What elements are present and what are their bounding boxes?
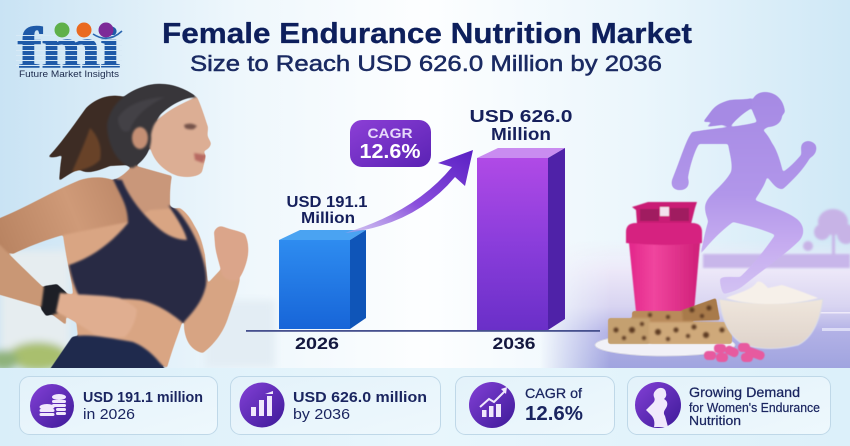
torso skin [63,208,205,368]
axis [246,330,600,332]
logo wordmark: Future Market Insights [19,69,120,79]
track and scenery, right side [540,209,850,368]
ponytail [48,96,130,181]
runner silhouette [672,92,816,294]
icon: coins [30,384,74,428]
CAGR pill: CAGR [368,126,413,141]
CAGR pill: 12.6% [360,141,421,163]
bottom strip [0,368,850,446]
watch [41,284,67,316]
woman runner photo [0,84,248,372]
CAGR pill [350,120,431,167]
bra [69,179,206,323]
lips [194,153,206,163]
trees [803,209,850,256]
value 2026 [286,194,368,227]
card: growing demand: Nutrition [689,414,741,428]
powder bowl [719,282,823,348]
subtitle: Size to Reach USD 626.0 Million by 2036 [190,51,662,76]
card: USD 191.1 million: in 2026 [83,407,135,423]
her left arm [184,218,240,353]
card text: USD 191.1 million [83,389,203,406]
icon: rising chart [469,382,515,428]
neck [113,165,190,240]
value 2026: USD 191.1 [286,194,368,211]
bar 2026 [279,230,366,329]
label 2036: 2036 [492,334,536,353]
card: USD 626.0 million [230,376,440,434]
growth arrow [345,150,473,233]
face [149,97,211,177]
ponytail highlight [72,128,101,172]
logo letters fmi: fmi [18,17,120,80]
shaker bottle [626,202,702,312]
logo: Future Market Insights [16,17,122,80]
hand on waist [56,293,137,338]
card: USD 191.1 million [20,376,218,434]
eye [184,124,197,129]
fist [214,226,248,281]
hair highlight [118,97,165,132]
card: CAGR: 12.6% [525,403,583,425]
title: Female Endurance Nutrition Market [162,18,692,50]
shorts [48,336,167,372]
icon: bar chart [240,382,284,428]
card: growing demand: for Women's Endurance [689,401,820,415]
icon: woman [635,382,681,428]
pink pills [704,343,766,362]
bar chart [246,106,600,353]
value 2026: Million [301,210,355,227]
upper arm [0,177,128,254]
card text: USD 626.0 million [293,389,427,406]
head hair [107,84,197,168]
bar 2036 [477,148,565,330]
blurred city background [0,250,275,370]
card: USD 626.0 million: by 2036 [293,407,350,423]
protein bars [608,298,732,344]
plate [595,334,735,356]
card text: CAGR of [525,385,582,401]
forearm [0,240,66,325]
card text: Growing Demand [689,384,800,400]
ear [132,127,148,149]
label 2026: 2026 [295,334,339,353]
value 2036: Million [491,124,551,144]
value 2036 [470,106,573,144]
card: CAGR [456,376,614,434]
value 2036: USD 626.0 [470,106,573,126]
card: growing demand [628,376,830,434]
